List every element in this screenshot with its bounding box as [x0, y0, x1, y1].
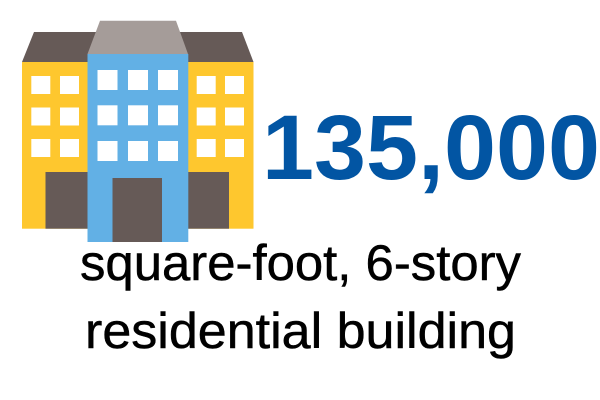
center tower windows [98, 70, 178, 161]
left wing [22, 62, 88, 229]
left wing roof [22, 32, 96, 62]
right wing roof [180, 32, 254, 62]
right wing door [188, 172, 229, 229]
center tower door [112, 178, 162, 242]
caption line 2: residential building [85, 303, 516, 359]
right wing windows [197, 76, 244, 157]
caption [80, 235, 521, 359]
right wing [188, 62, 254, 229]
caption line 1: square-foot, 6-story [80, 235, 521, 291]
icon: apartment building [22, 21, 254, 242]
center tower roof [88, 21, 188, 54]
center tower [88, 54, 188, 242]
big number: 135,000 [262, 97, 600, 199]
left wing door [46, 172, 88, 229]
left wing windows [31, 76, 79, 157]
